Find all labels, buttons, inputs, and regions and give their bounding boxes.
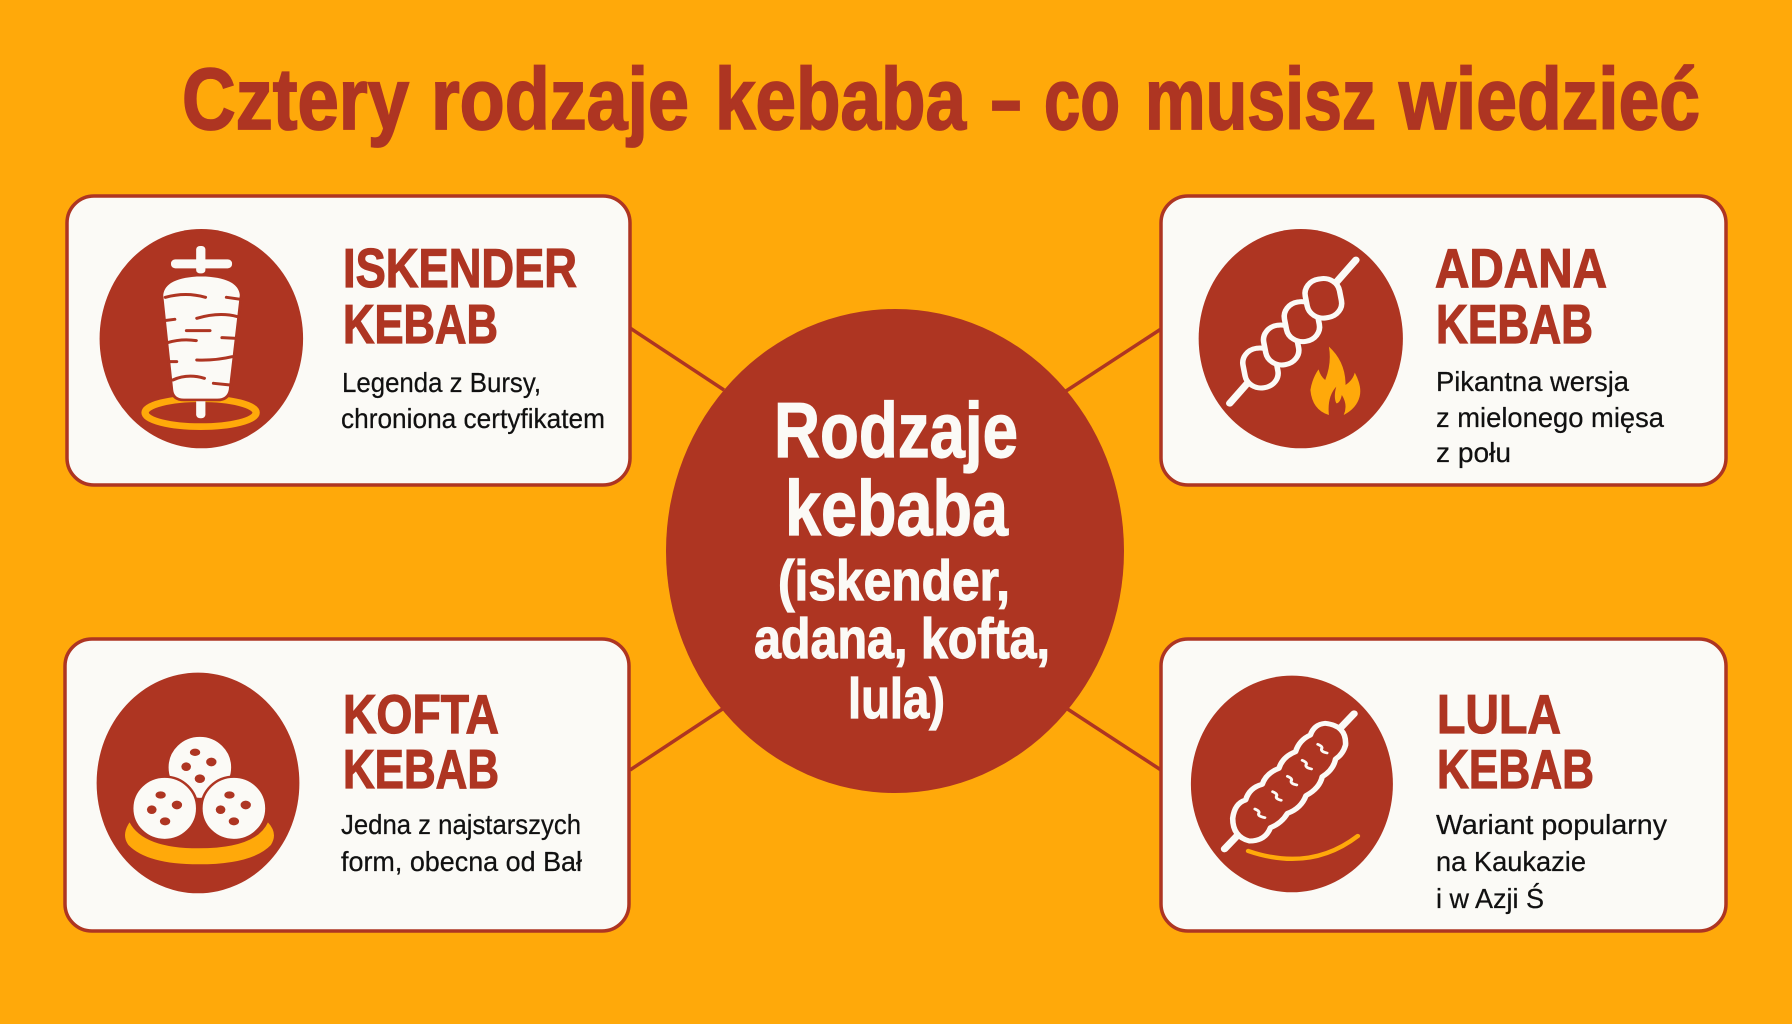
text: kofta description: Jedna z najstarszych [341,809,581,840]
heading: kofta kebab [343,683,499,800]
central circle: (iskender, [778,549,1010,613]
heading: adana kebab [1435,237,1607,355]
title: kebaba [715,51,967,148]
icon: lula skewer [1191,676,1393,892]
heading: adana kebab: ADANA [1435,237,1607,299]
text: iskender description: Legenda z Bursy, [342,367,541,398]
text: adana description: z mielonego mięsa [1436,402,1664,433]
panel: lula kebab [1161,639,1726,931]
panel: kofta kebab [65,639,629,931]
text: adana description: z połu [1436,437,1511,468]
title: rodzaje [431,51,689,148]
central circle: kebaba [785,464,1009,552]
heading: kofta kebab: KOFTA [343,683,499,745]
heading: lula kebab: LULA [1437,683,1561,745]
text: lula description: Wariant popularny [1436,809,1667,840]
title: co [1044,51,1120,148]
text: lula description: i w Azji Ś [1436,882,1544,914]
text: iskender description [341,367,605,434]
icon: skewer with flame [1199,229,1403,448]
connector lines [630,328,1161,770]
panel: iskender kebab [67,196,630,485]
text: lula description [1436,809,1667,914]
title: Cztery [182,51,409,148]
heading: iskender kebab [343,237,577,355]
heading: iskender kebab: ISKENDER [343,237,577,299]
heading: adana kebab: KEBAB [1436,293,1593,355]
central circle: adana, kofta, [754,607,1050,671]
heading: iskender kebab: KEBAB [343,293,498,355]
heading: lula kebab: KEBAB [1437,738,1594,800]
title: – [991,51,1021,148]
text: kofta description [341,809,583,877]
text: iskender description: chroniona certyfikatem [341,403,605,434]
text: adana description [1436,366,1664,468]
title: wiedzieć [1398,51,1700,148]
text: lula description: na Kaukazie [1436,846,1586,877]
text: adana description: Pikantna wersja [1436,366,1629,397]
heading: lula kebab [1437,683,1594,800]
central circle: lula) [848,667,945,731]
title [182,51,1700,148]
text: kofta description: form, obecna od Bał [341,846,583,877]
title: musisz [1145,51,1376,148]
heading: kofta kebab: KEBAB [343,738,499,800]
panel: adana kebab [1161,196,1726,485]
central circle: Rodzaje [774,386,1018,474]
central circle [666,309,1124,793]
icon: doner spit [100,229,303,448]
icon: meatballs on plate [97,673,299,893]
